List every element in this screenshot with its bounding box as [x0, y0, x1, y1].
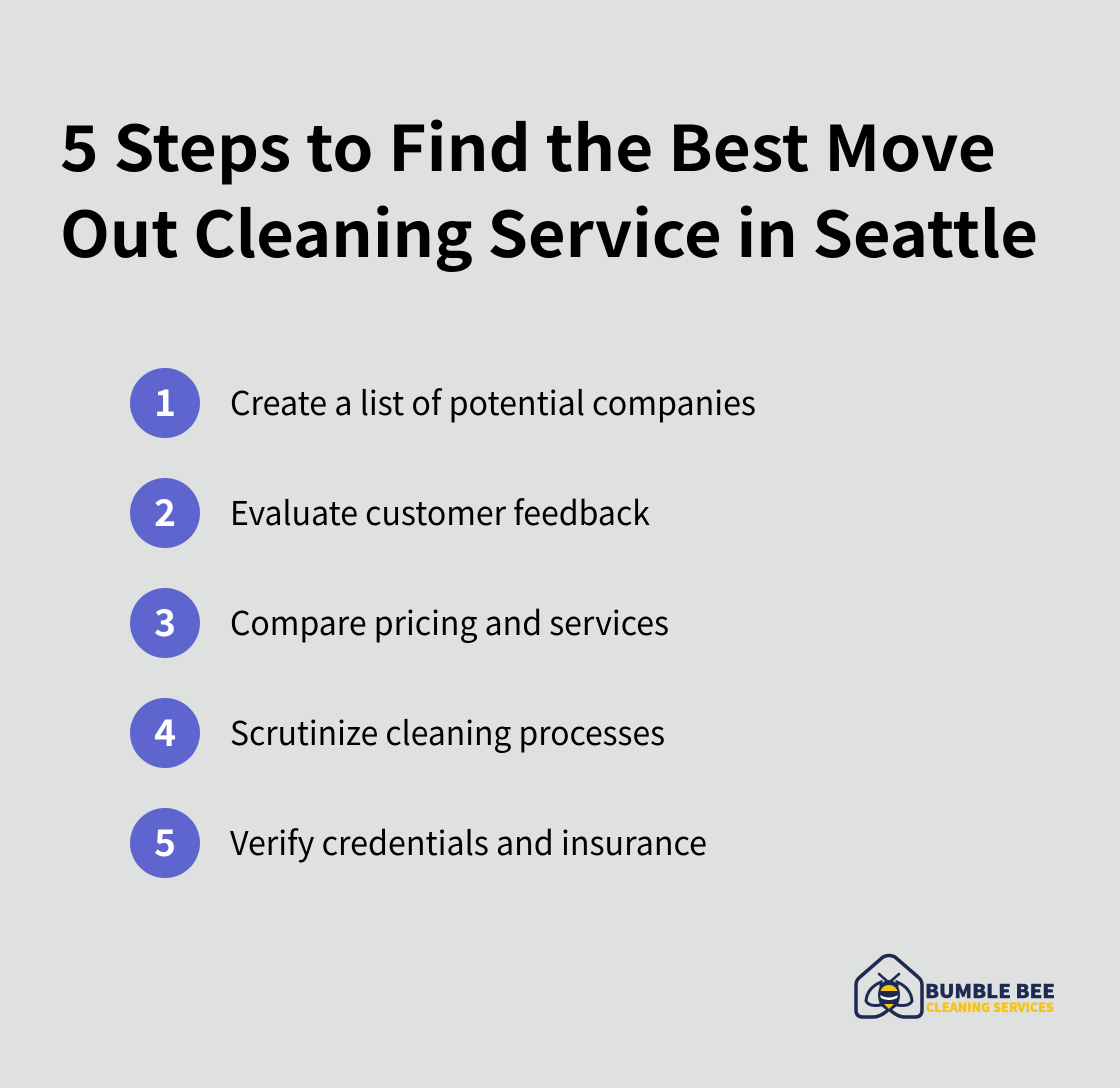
step 3: [130, 588, 669, 658]
step 1: 1: [154, 373, 176, 427]
title: 5 Steps to Find the Best Move: [60, 99, 996, 190]
step 5: 5: [154, 813, 176, 867]
logo: Bumble Bee Cleaning Services: [856, 956, 1055, 1017]
step 4: 4: [154, 703, 176, 757]
step 5: Verify credentials and insurance: [230, 817, 707, 865]
logo tagline: CLEANING SERVICES: [926, 997, 1054, 1016]
step 2: 2: [154, 483, 176, 537]
step 1: Create a list of potential companies: [230, 377, 756, 425]
step 4: Scrutinize cleaning processes: [230, 707, 665, 755]
step 2: [130, 478, 650, 548]
step 4: [130, 698, 665, 768]
icon: house with bee: [856, 956, 922, 1017]
logo wordmark: BUMBLE BEE: [925, 977, 1055, 1004]
step 5: [130, 808, 707, 878]
step 3: Compare pricing and services: [230, 597, 669, 645]
step 1: [130, 368, 756, 438]
step 3: 3: [154, 593, 176, 647]
steps list: [130, 368, 756, 878]
title: Out Cleaning Service in Seattle: [60, 185, 1038, 276]
title: [60, 99, 1038, 276]
step 2: Evaluate customer feedback: [230, 487, 650, 535]
